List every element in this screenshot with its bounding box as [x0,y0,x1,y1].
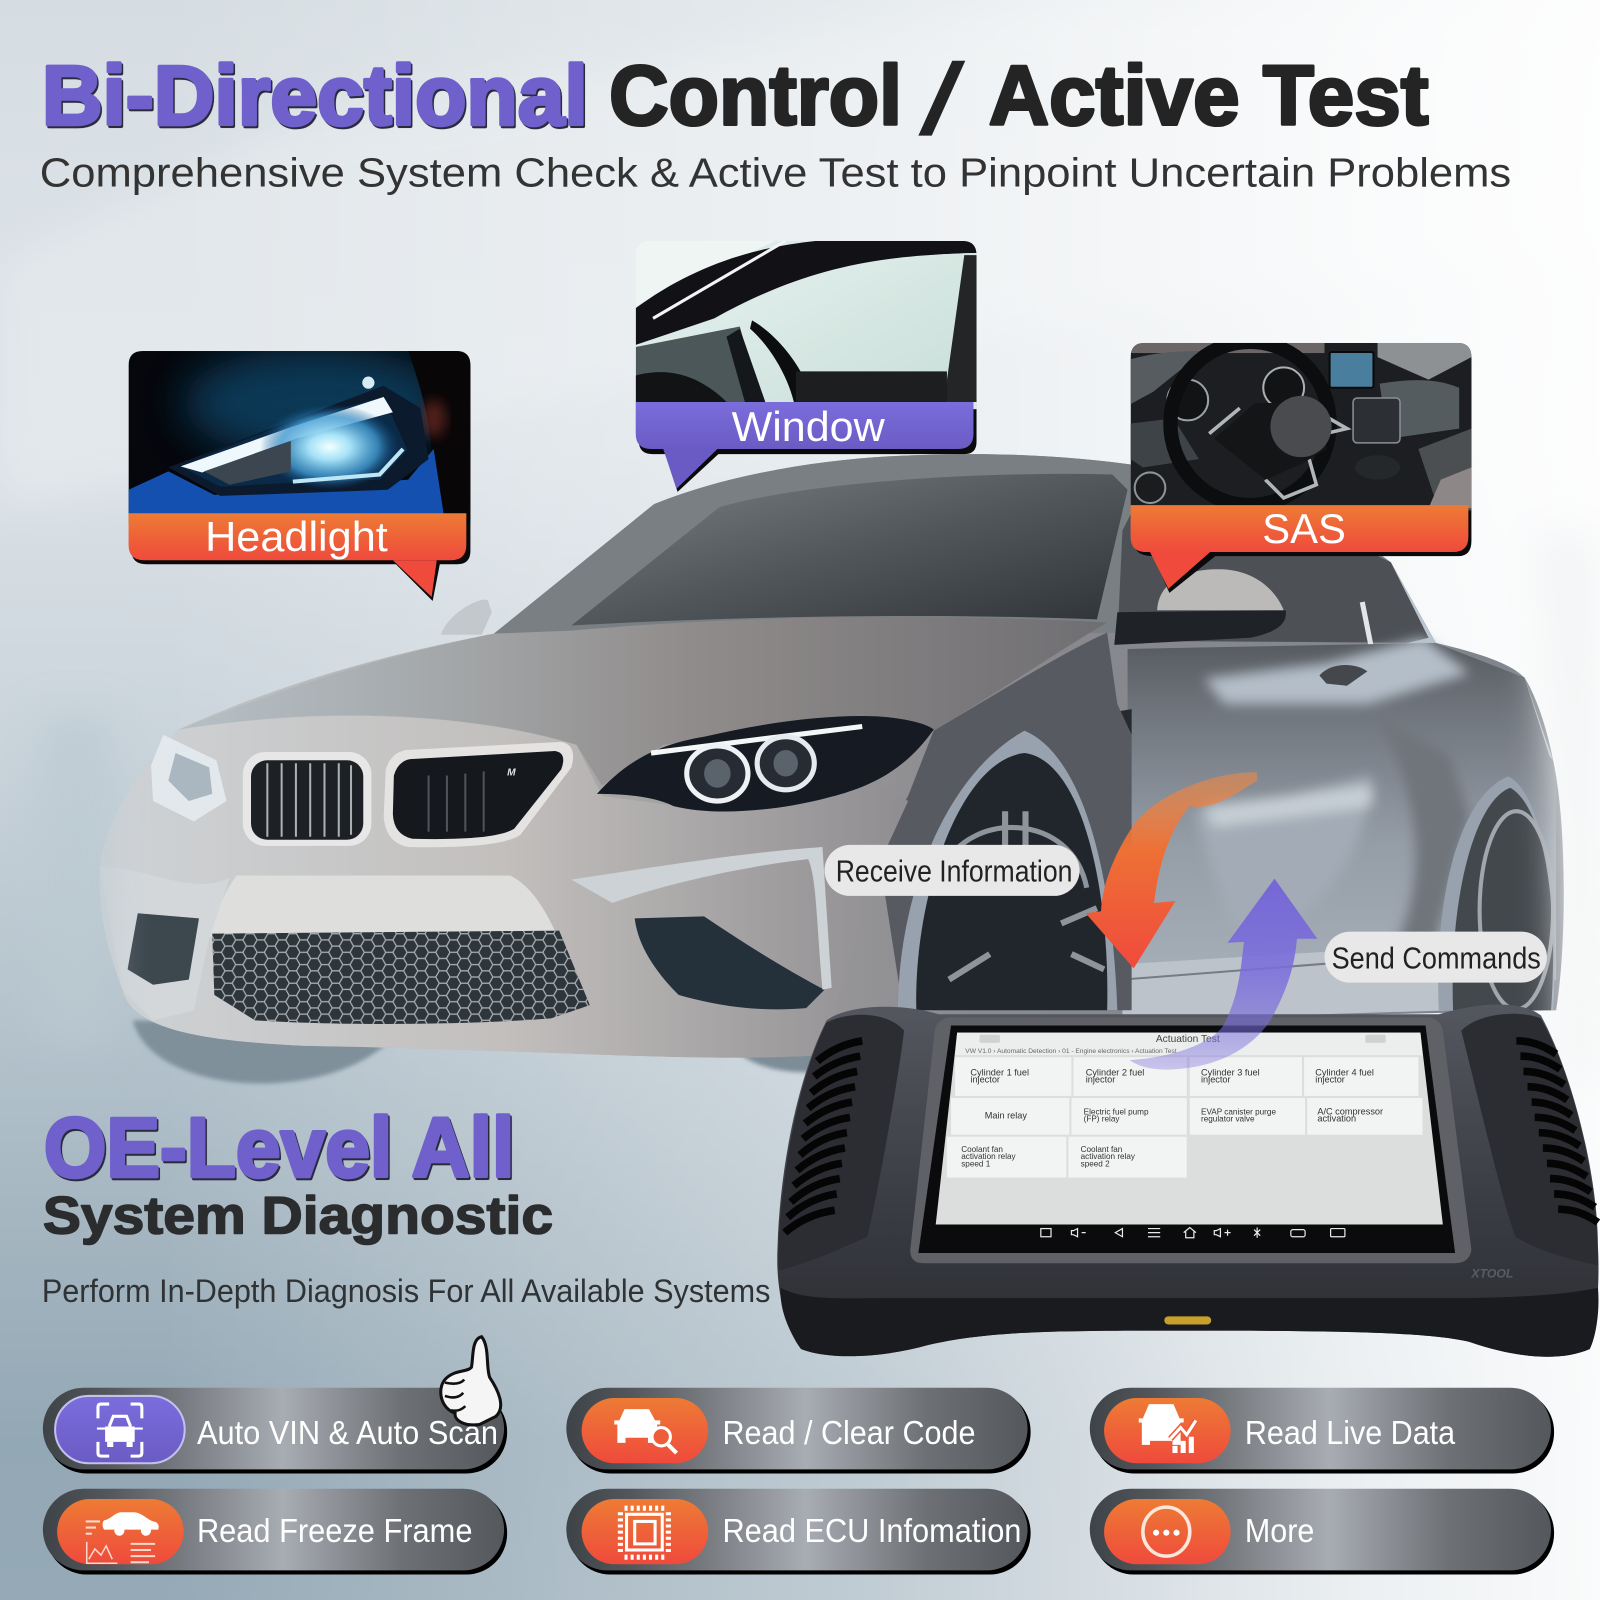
feature button: auto vin [43,1388,507,1473]
actuation tiles [947,1057,1422,1178]
front wheel [916,753,1107,1010]
kidney grille left [243,752,371,846]
actuation tiles: speed 2 [1081,1159,1110,1168]
subtitle: Comprehensive System Check & Active Test to Pinpoint Uncertain Problems [40,150,1511,196]
icon: car scan [97,1404,143,1456]
title: Control [609,47,902,142]
screen header text [965,1034,1386,1055]
actuation tiles: (FP) relay [1084,1114,1120,1123]
callout: headlight [129,347,470,601]
label: send commands [1324,932,1547,983]
icon: car window photo [636,241,977,409]
actuation tiles: injector [1315,1075,1345,1085]
front wheel arch [898,731,1117,1010]
right grip [1461,1014,1598,1265]
body fades [1531,531,1600,1082]
description: Perform In-Depth Diagnosis For All Available Systems [42,1272,770,1309]
door handle [1319,665,1367,686]
actuation tiles: speed 1 [961,1159,991,1168]
rear wheel [1438,777,1555,1010]
wing mirror [1114,569,1286,645]
icon: thumbs up [441,1337,501,1425]
actuation tiles: Cylinder 1 fuel [970,1068,1029,1078]
actuation tiles: EVAP canister purge [1201,1107,1276,1116]
lower mesh grille [212,931,590,1024]
feature button: more [1090,1489,1554,1574]
feature button: read live data: Read Live Data [1245,1415,1455,1452]
pogo connector [1164,1316,1211,1324]
callout: SAS [1131,342,1471,593]
kidney grille right [384,742,573,847]
callout: window: Window [732,403,885,450]
label: receive information [824,845,1080,896]
car body silhouette [99,454,1564,1058]
arrow: receive (orange) [1086,772,1257,968]
heading: system diagnostic: System Diagnostic [43,1187,553,1246]
kidney grille right: M [507,768,516,779]
icon: steering wheel photo [1131,342,1471,511]
hood [179,617,1107,786]
device body [777,1004,1598,1357]
feature button: auto vin: Auto VIN & Auto Scan [197,1415,498,1452]
screen header text: Actuation Test [1156,1034,1220,1045]
actuation tiles: injector [1086,1075,1115,1085]
callout: SAS: SAS [1262,505,1346,552]
car photo illustration [41,454,1600,1084]
arrow: send (purple) [1130,879,1317,1070]
left headlight [151,735,227,821]
actuation tiles: activation relay [961,1152,1017,1161]
feature button: read clear code: Read / Clear Code [722,1415,976,1452]
actuation tiles: regulator valve [1201,1114,1255,1123]
title: / [918,43,966,157]
icon: car magnifier [614,1409,677,1453]
front tires [133,1020,886,1084]
actuation tiles: Cylinder 2 fuel [1086,1068,1144,1078]
icon: freeze frame car and charts [86,1512,159,1563]
label: receive information: Receive Information [836,855,1072,889]
icon: headlight photo [129,347,470,524]
actuation tiles: A/C compressor [1317,1106,1383,1116]
left air vent [128,913,199,985]
tablet device [777,1004,1598,1357]
side window [1117,490,1436,643]
callout: window [636,241,977,492]
screen header text: VW V1.0 › Automatic Detection › 01 - Engine electronics › Actuation Test [965,1048,1177,1055]
title [42,43,1429,157]
actuation tiles: Cylinder 3 fuel [1201,1068,1260,1078]
feature button: read freeze frame [43,1489,507,1574]
icon: chip [620,1508,668,1557]
actuation tiles: Electric fuel pump [1084,1107,1149,1116]
front fascia [99,716,908,1058]
icon: more dots [1143,1507,1190,1556]
navigation bar icons [1041,1228,1345,1238]
windshield [571,474,1128,626]
actuation tiles: injector [1201,1075,1231,1085]
device logo: XTOOL [1470,1267,1513,1281]
right headlight [597,716,934,812]
feature button: read freeze frame: Read Freeze Frame [197,1513,472,1550]
side mirror [441,600,492,635]
title: Active Test [989,47,1429,142]
door panels [1128,643,1556,1010]
bumper panel [209,876,556,937]
device front lip [781,1288,1598,1357]
actuation tiles: Coolant fan [1081,1145,1122,1154]
roof [494,454,1204,638]
lower sill [1122,944,1454,1020]
heading: OE-Level All: OE-Level All [44,1100,514,1195]
actuation tiles: Coolant fan [961,1145,1003,1154]
title: Bi-Directional [42,47,588,142]
feature button: more: More [1245,1513,1314,1550]
screen [936,1033,1443,1224]
left grip [779,1015,904,1270]
actuation tiles: Cylinder 4 fuel [1315,1068,1374,1078]
door reflections [1194,638,1469,980]
actuation tiles: activation [1317,1113,1356,1123]
actuation tiles: activation relay [1081,1152,1136,1161]
actuation tiles: injector [970,1075,1000,1085]
actuation tiles: Main relay [985,1110,1027,1120]
icon: car with chart [1139,1404,1196,1453]
callout: headlight: Headlight [205,513,388,560]
feature button: read ecu information [566,1489,1031,1574]
feature button: read clear code [566,1388,1031,1473]
front fender [878,633,1132,1010]
label: send commands: Send Commands [1332,941,1541,975]
feature button: read ecu information: Read ECU Infomation [722,1513,1021,1550]
screen frame [910,1017,1471,1263]
feature button: read live data [1090,1388,1554,1473]
right air vent [635,916,824,1009]
rear roof highlight [1367,562,1553,760]
chrome trim [571,847,832,990]
